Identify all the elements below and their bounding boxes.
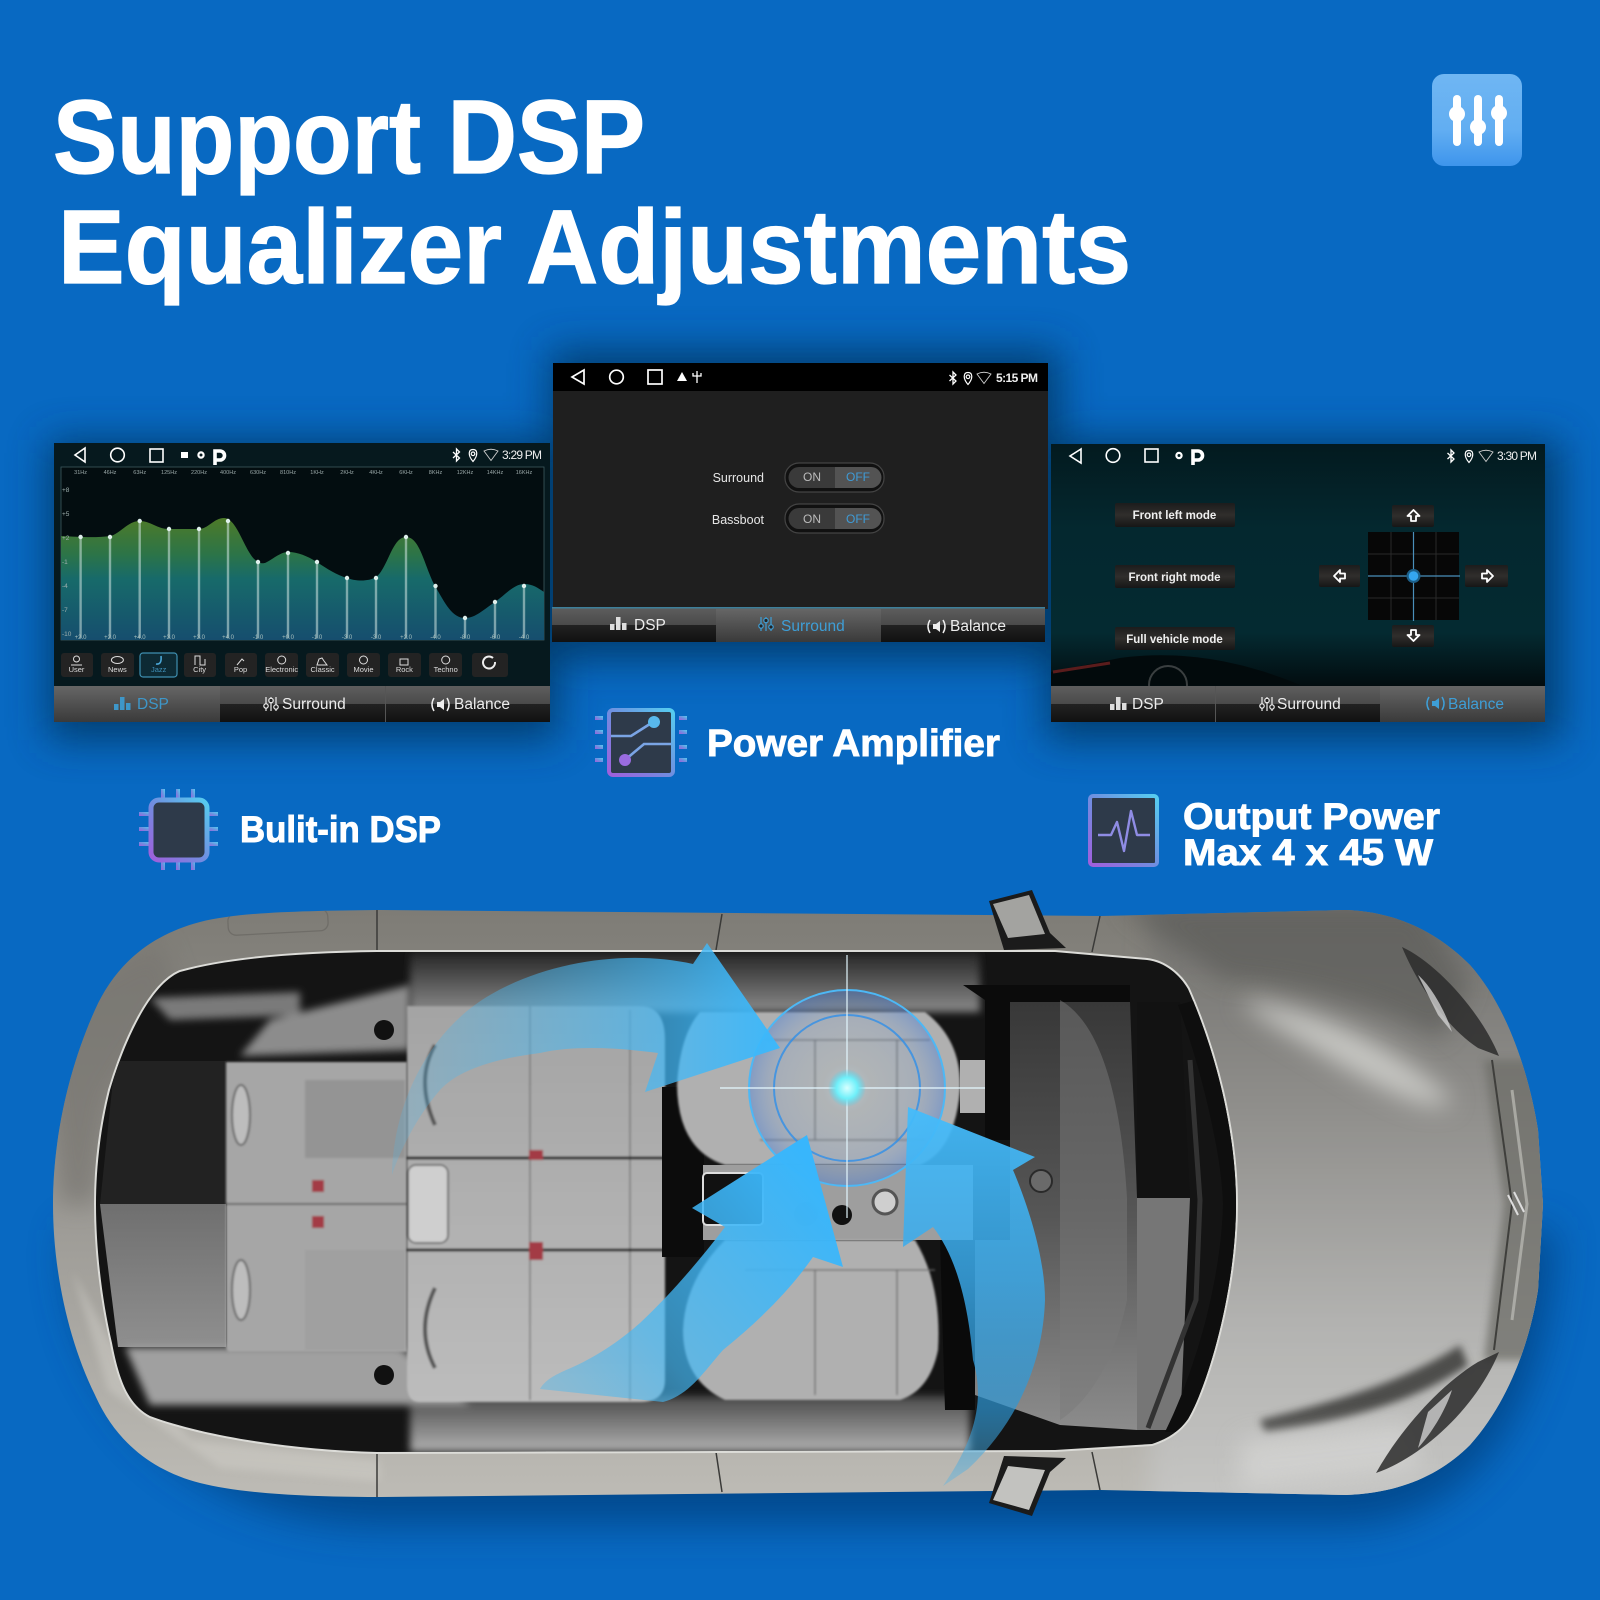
preset buttons: News [108, 665, 127, 674]
value labels: +2.0 [400, 635, 413, 641]
feature: built-in DSP [139, 789, 441, 870]
arrow: sound wave top [392, 943, 780, 1175]
preset buttons [61, 653, 508, 677]
tab bar: Surround [1277, 696, 1341, 713]
status bar left icons [1070, 449, 1202, 465]
frequency labels: 46Hz [104, 470, 117, 476]
value labels [75, 635, 530, 641]
label: Bulit-in DSP [240, 809, 441, 850]
y axis labels: +8 [62, 487, 70, 494]
bassboot toggle row: ON [803, 512, 821, 526]
door seams [377, 910, 1100, 1497]
value labels: +2.0 [104, 635, 117, 641]
icon: equalizer app [1432, 74, 1522, 166]
y axis labels: +2 [62, 535, 70, 542]
value labels: +4.0 [134, 635, 146, 641]
wiper recess [1165, 1000, 1238, 1432]
status bar left icons [572, 370, 701, 384]
panel: DSP equalizer screen [54, 443, 550, 722]
y axis labels: -4 [62, 583, 68, 590]
y axis labels: -10 [62, 631, 72, 638]
car body [53, 910, 1543, 1497]
surround toggle row: ON [803, 470, 821, 484]
blue glow center [720, 955, 985, 1218]
preset buttons: Movie [353, 665, 374, 674]
front footwell [662, 1087, 668, 1257]
rear body shading [54, 950, 166, 1210]
hood [40, 880, 1580, 1530]
value labels: +4.0 [222, 635, 235, 641]
value labels: +3.0 [163, 635, 176, 641]
arrow: sound wave right [903, 1107, 1045, 1486]
mode buttons [1115, 503, 1235, 650]
tab bar: Surround [781, 618, 845, 635]
frequency labels: 63Hz [133, 470, 146, 476]
rear cargo glass [100, 1061, 226, 1204]
frequency labels: 810Hz [280, 470, 296, 476]
frequency labels: 630Hz [250, 470, 266, 476]
window trim [96, 952, 1236, 1452]
value labels: -1.0 [312, 635, 323, 641]
bassboot toggle row: Bassboot [712, 513, 765, 527]
mode buttons: Full vehicle mode [1126, 634, 1223, 646]
rear fuel door [227, 908, 329, 936]
cabin interior [90, 945, 1250, 1460]
clock: 5:15 PM [996, 371, 1038, 385]
lower rear area [125, 1347, 470, 1405]
feature: power amplifier [595, 710, 1000, 775]
frequency labels: 4KHz [369, 470, 383, 476]
y axis labels [62, 487, 72, 638]
tab bar: Balance [1448, 696, 1504, 713]
value labels: -3.0 [371, 635, 382, 641]
tab bar: DSP [634, 617, 666, 634]
value labels: -4.0 [430, 635, 441, 641]
label: Power Amplifier [707, 723, 1000, 765]
tab bar: Surround [282, 696, 346, 713]
frequency labels: 8KHz [429, 470, 442, 476]
preset buttons: City [193, 665, 206, 674]
y axis labels: +5 [62, 511, 70, 518]
frequency labels: 12KHz [457, 470, 474, 476]
car: top view [40, 880, 1580, 1530]
preset buttons: Electronic [265, 665, 298, 674]
value labels: -3.0 [342, 635, 353, 641]
third row bench [226, 1062, 407, 1352]
upper pillar streak [150, 985, 410, 1056]
icon: processor [139, 789, 218, 870]
value labels: -8.0 [460, 635, 471, 641]
mode buttons: Front left mode [1133, 510, 1216, 522]
frequency labels: 31Hz [74, 470, 87, 476]
y axis labels: -1 [62, 559, 68, 566]
preset buttons: User [69, 665, 85, 674]
frequency labels: 6KHz [399, 470, 413, 476]
tab bar [1051, 686, 1545, 722]
title: Equalizer Adjustments [58, 189, 1131, 306]
dashboard [975, 1002, 1137, 1430]
preset buttons: Pop [234, 665, 247, 674]
front seat bottom [683, 1240, 939, 1400]
value labels: +2.0 [75, 635, 87, 641]
dash black column [963, 985, 1130, 1140]
value labels: +3.0 [193, 635, 206, 641]
title [53, 79, 1131, 306]
status bar right icons [453, 449, 498, 462]
mode buttons: Front right mode [1128, 572, 1220, 584]
car silhouette [1051, 655, 1300, 704]
value labels: -1.0 [253, 635, 264, 641]
label: Output Power [1183, 796, 1440, 837]
side mirrors [989, 890, 1066, 1516]
sill light [377, 934, 1000, 942]
title: Support DSP [53, 79, 645, 196]
balance pad [1368, 532, 1460, 621]
icon: waveform [1090, 796, 1157, 865]
silver block [960, 1060, 987, 1113]
slider bars [81, 521, 524, 638]
clock: 3:30 PM [1497, 449, 1537, 463]
value labels: +0.0 [282, 635, 295, 641]
tab bar [552, 607, 1045, 642]
car shadow [69, 1230, 1555, 1525]
tab bar: DSP [137, 696, 169, 713]
arrow: sound wave middle [540, 1135, 843, 1402]
tab bar: DSP [1132, 696, 1164, 713]
preset buttons: Jazz [151, 665, 167, 674]
value labels: -4.0 [519, 635, 530, 641]
grille emblem [1508, 1192, 1524, 1215]
headlights [1376, 947, 1499, 1473]
preset buttons: Rock [396, 665, 413, 674]
tab bar: Balance [950, 618, 1006, 635]
icon: circuit chip [595, 710, 687, 775]
nose band [1480, 1058, 1543, 1364]
preset buttons: Classic [311, 665, 335, 674]
panel: surround screen [552, 363, 1048, 642]
tab bar: Balance [454, 696, 510, 713]
status bar left icons [75, 448, 224, 465]
surround toggle row: Surround [713, 471, 764, 485]
clock: 3:29 PM [502, 448, 542, 462]
surround toggle row [713, 463, 884, 492]
frequency labels: 2KHz [340, 470, 354, 476]
y axis labels: -7 [62, 607, 68, 614]
frequency labels: 14KHz [487, 470, 504, 476]
slider knobs [78, 519, 526, 620]
status bar right icons [1448, 450, 1493, 462]
feature: output power [1090, 796, 1440, 873]
roof and floor strips [410, 952, 980, 1452]
pad arrows [1319, 505, 1508, 647]
footwell right [940, 1240, 975, 1410]
second row bench [407, 1006, 665, 1402]
tab bar [54, 686, 550, 722]
label: Max 4 x 45 W [1183, 832, 1433, 873]
bassboot toggle row: OFF [846, 512, 870, 526]
frequency labels: 16KHz [516, 470, 533, 476]
screen shadows [48, 350, 1561, 740]
frequency labels [74, 470, 533, 476]
preset buttons: Techno [434, 665, 458, 674]
panel: balance screen [1051, 444, 1545, 722]
front seat top [677, 1012, 960, 1165]
label [1183, 796, 1440, 873]
surround toggle row: OFF [846, 470, 870, 484]
frequency labels: 125Hz [161, 470, 177, 476]
speakers rear [374, 1020, 394, 1040]
frequency labels: 1KHz [310, 470, 324, 476]
bassboot toggle row [712, 504, 884, 533]
value labels: -6.0 [490, 635, 501, 641]
frequency labels: 400Hz [220, 470, 236, 476]
status bar right icons [950, 372, 991, 384]
center console [703, 1165, 973, 1240]
equalizer chart [61, 467, 544, 641]
frequency labels: 220Hz [191, 470, 207, 476]
